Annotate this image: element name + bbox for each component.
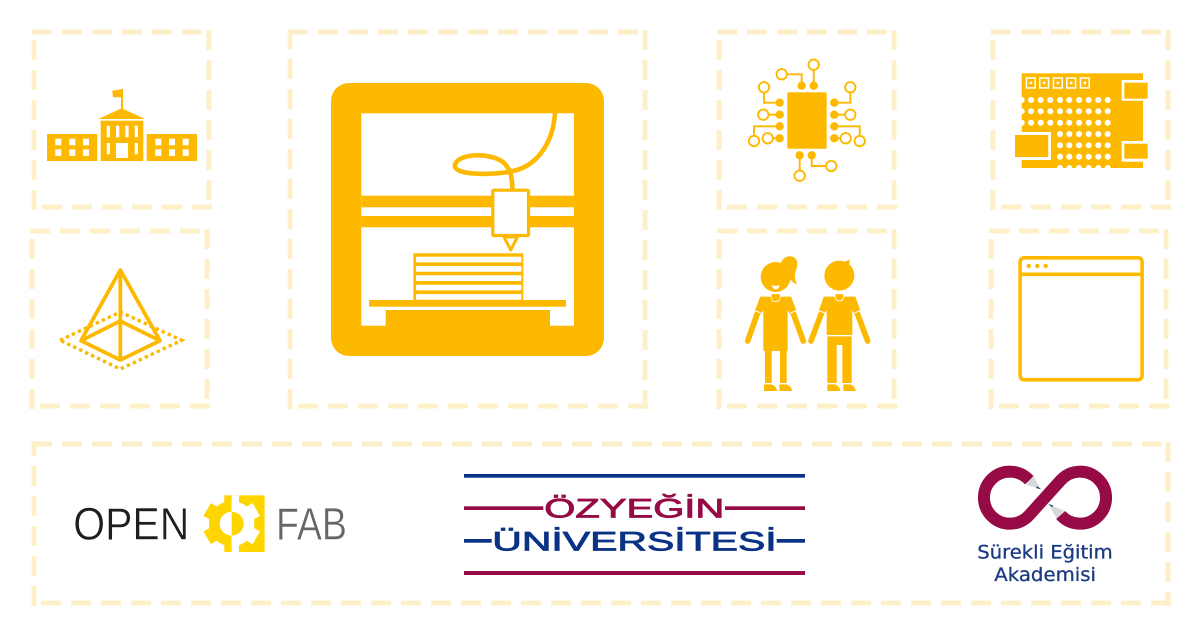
OPEN wordmark: OPEN	[73, 498, 189, 549]
panel: school frame	[32, 30, 212, 210]
FAB wordmark: FAB	[276, 498, 347, 549]
logo: OpenFab	[73, 495, 347, 552]
Özyeğin wordmark: ÖZYEĞİN	[544, 493, 724, 524]
panel: 3D printer frame	[288, 30, 648, 409]
panel: browser frame	[989, 229, 1169, 409]
icon: two children	[748, 256, 868, 391]
icon: circuit chip	[749, 59, 865, 181]
panel: kids frame	[717, 229, 897, 409]
panel: pyramid frame	[30, 229, 210, 409]
icon: pyramid on dotted plane	[60, 270, 182, 369]
icon: browser window	[1020, 258, 1142, 380]
logo: Özyeğin Üniversitesi	[464, 474, 805, 575]
icon: electronics board	[1013, 73, 1149, 171]
panel: board frame	[991, 30, 1171, 210]
infinity mark	[984, 472, 1106, 524]
boy	[811, 260, 868, 391]
panel: circuit frame	[717, 30, 897, 210]
panel: logos frame	[32, 442, 1171, 606]
Üniversitesi wordmark: ÜNİVERSİTESİ	[492, 526, 777, 557]
logo: Sürekli Eğitim Akademisi	[977, 472, 1113, 586]
icon: 3D printer	[331, 83, 604, 356]
girl	[748, 256, 803, 391]
gear mark	[203, 495, 265, 552]
academy name: Sürekli Eğitim	[977, 541, 1113, 563]
academy name line two: Akademisi	[994, 564, 1096, 586]
icon: school building	[47, 89, 197, 161]
